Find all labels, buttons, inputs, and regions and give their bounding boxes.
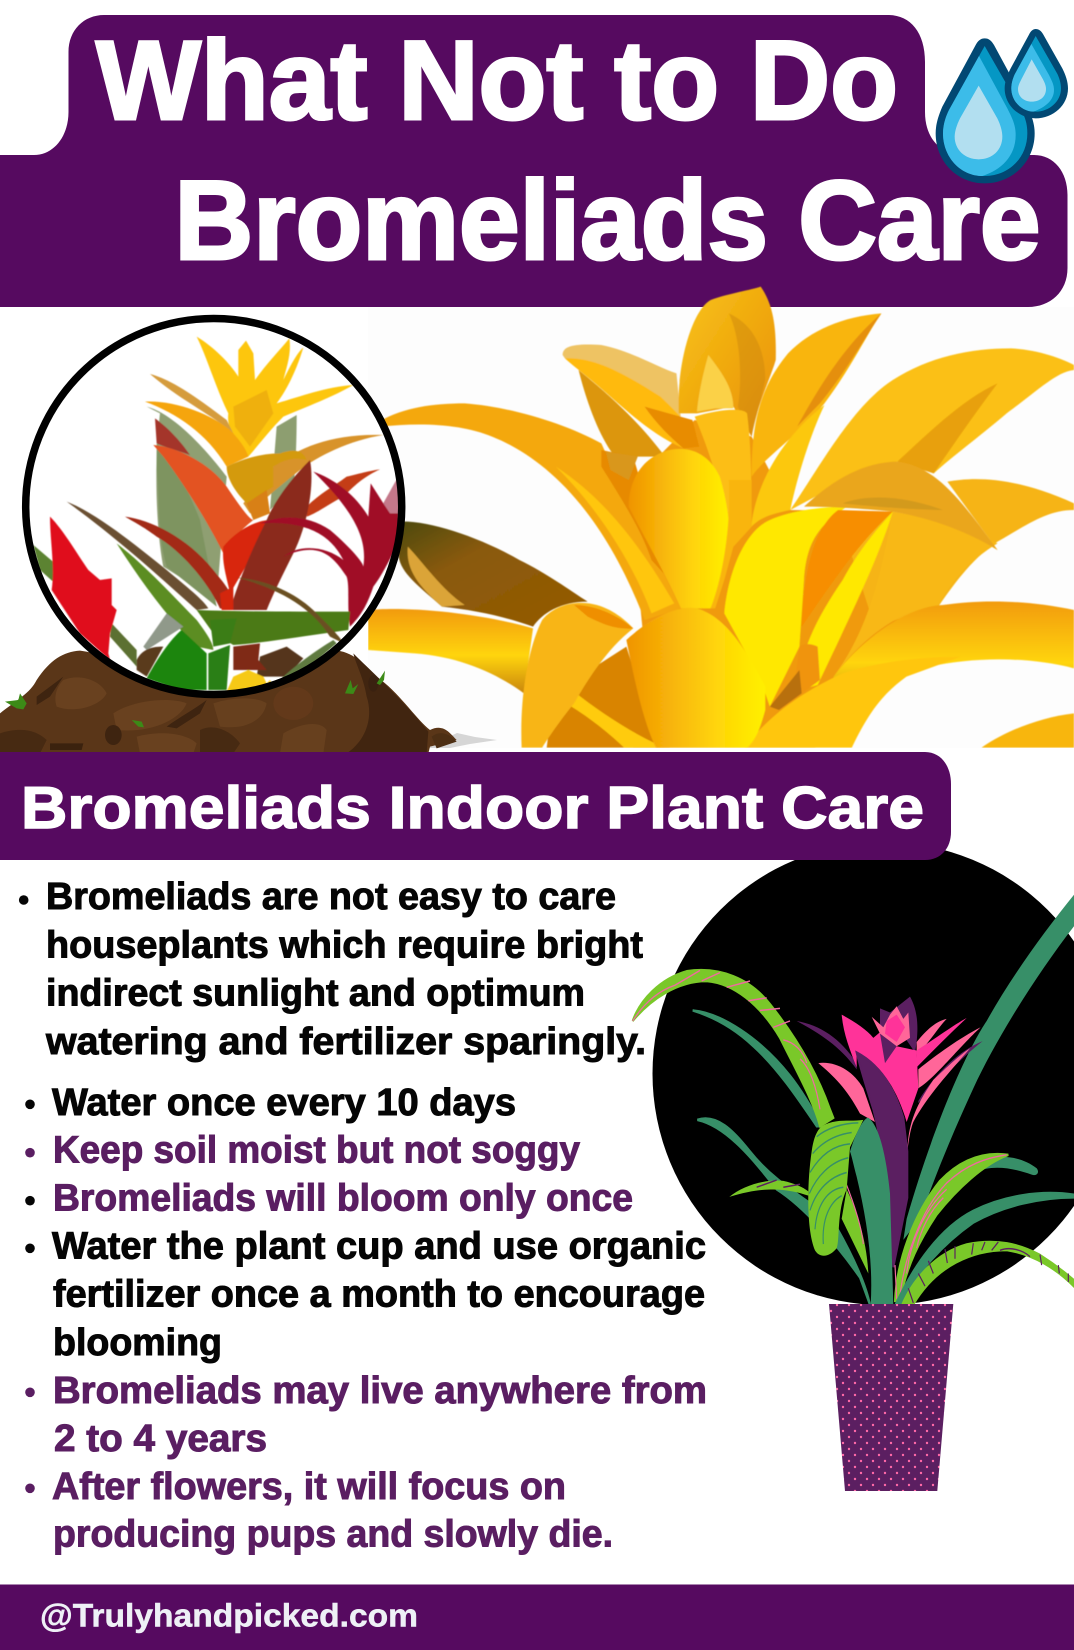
title banner bbox=[0, 15, 1068, 307]
illustration: yellow bromeliad photo bbox=[368, 287, 1074, 748]
tip: bloom: Bromeliads will bloom only once bbox=[53, 1178, 633, 1220]
tip: watering: Water once every 10 days bbox=[52, 1082, 516, 1124]
tip: pups bbox=[25, 1466, 613, 1556]
tip: fertilizer: Water the plant cup and use organic bbox=[52, 1226, 706, 1268]
footer bar bbox=[0, 1584, 1074, 1650]
text block: intro bullet: indirect sunlight and optimum bbox=[46, 973, 585, 1015]
text block: intro bullet: watering and fertilizer sparingly. bbox=[45, 1021, 646, 1063]
tip: fertilizer bbox=[25, 1226, 706, 1364]
guzmania plant bbox=[33, 337, 398, 692]
plant bbox=[633, 895, 1074, 1305]
footer text: @Trulyhandpicked.com bbox=[40, 1598, 418, 1634]
tip: pups: After flowers, it will focus on bbox=[52, 1466, 566, 1508]
banner shape bbox=[0, 15, 1068, 307]
tip: lifespan: Bromeliads may live anywhere from bbox=[53, 1370, 707, 1412]
text block: intro bullet bbox=[19, 876, 646, 1063]
section heading bar bbox=[0, 752, 951, 860]
heading shape bbox=[0, 752, 951, 860]
flower pot bbox=[829, 1304, 953, 1491]
round frame fill bbox=[26, 318, 402, 694]
center underlay bbox=[629, 420, 938, 748]
title line 1: What Not to Do bbox=[96, 17, 898, 143]
round frame ring bbox=[26, 318, 402, 694]
photo backdrop bbox=[368, 307, 1074, 748]
text block: care tips list bbox=[25, 1082, 707, 1556]
title line 2: Bromeliads Care bbox=[174, 157, 1040, 283]
heading text: Bromeliads Indoor Plant Care bbox=[21, 775, 924, 841]
tip: lifespan: 2 to 4 years bbox=[54, 1418, 267, 1460]
tip: pups: producing pups and slowly die. bbox=[53, 1514, 613, 1556]
tip: lifespan bbox=[25, 1370, 707, 1460]
black circle bbox=[652, 842, 1074, 1305]
illustration: soil mound bbox=[0, 650, 497, 753]
illustration: potted pink bromeliad on black circle bbox=[633, 842, 1074, 1491]
text block: intro bullet: houseplants which require bright bbox=[46, 924, 643, 966]
icon: water drops bbox=[936, 29, 1068, 183]
tip: fertilizer: fertilizer once a month to encourage bbox=[53, 1274, 705, 1316]
tip: soil: Keep soil moist but not soggy bbox=[53, 1130, 580, 1172]
tip: fertilizer: blooming bbox=[53, 1322, 222, 1364]
illustration: guzmania in round frame bbox=[26, 318, 402, 694]
text block: intro bullet: Bromeliads are not easy to care bbox=[46, 876, 616, 918]
